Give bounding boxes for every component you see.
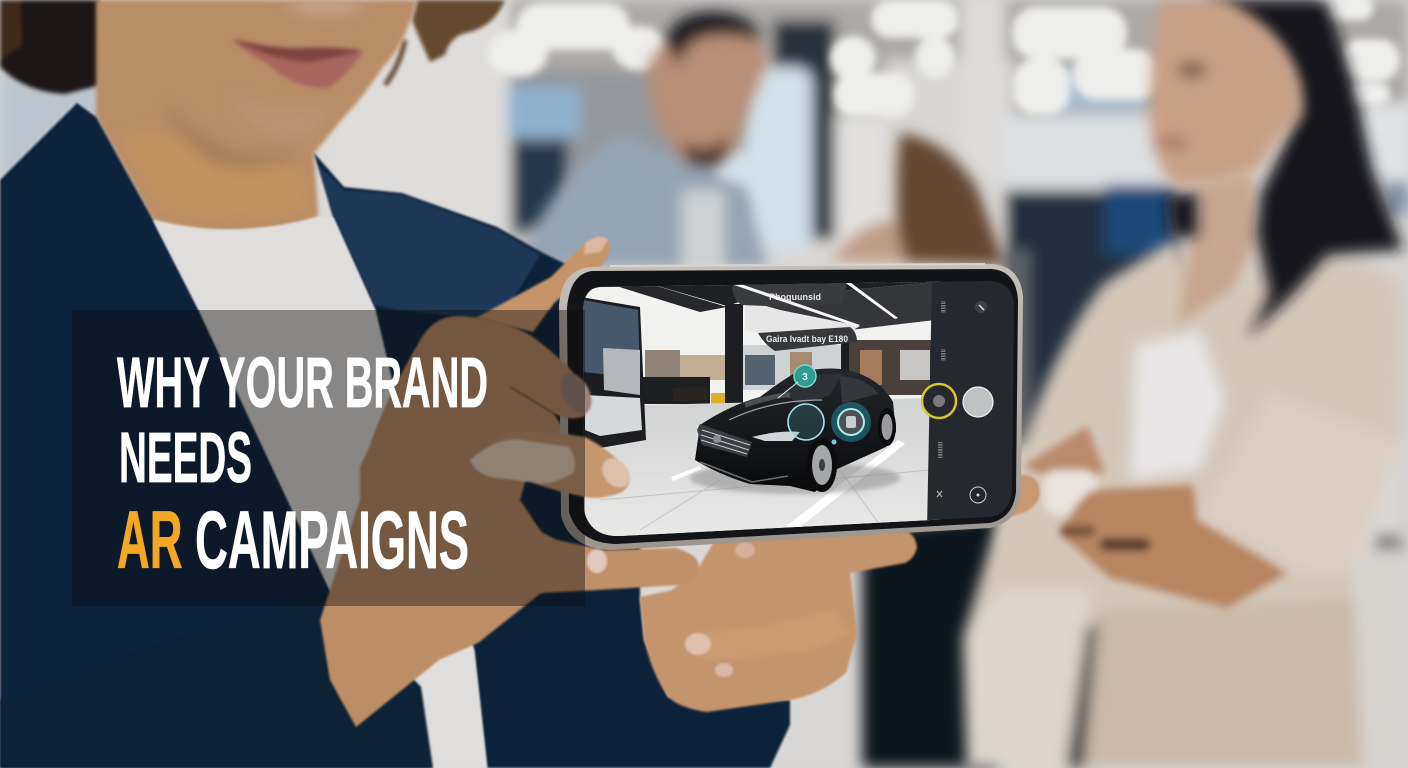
hair <box>0 0 505 94</box>
side mode labels: IIIIIII <box>939 301 945 313</box>
store scene <box>580 280 940 540</box>
yellow focus dial <box>922 384 956 418</box>
headline: NEEDS <box>119 419 252 498</box>
thumb on the right edge <box>1012 475 1040 516</box>
lips <box>232 39 363 88</box>
phone black bezel <box>567 269 1018 544</box>
nails <box>685 633 711 655</box>
face and neck <box>96 0 417 233</box>
right woman hair <box>1167 0 1403 338</box>
sign text: top: Phoquunsid <box>769 292 821 302</box>
camera control panel: IIIIIII <box>939 349 945 361</box>
person: woman on right <box>963 0 1403 768</box>
white shirt <box>153 217 487 768</box>
navy blazer <box>0 103 790 768</box>
right woman blazer <box>963 240 1403 768</box>
top icon <box>975 301 987 313</box>
person: foreground woman <box>0 0 790 768</box>
title panel <box>72 310 585 606</box>
right woman face <box>1150 0 1302 186</box>
ring finger <box>430 507 699 593</box>
camera control panel <box>920 281 1014 520</box>
signs <box>732 283 847 307</box>
finger <box>684 610 850 660</box>
headline: WHY YOUR BRAND <box>117 344 488 423</box>
car front wheel <box>807 438 837 492</box>
translucent overlay <box>72 310 585 606</box>
camera control panel: IIIIIIIIII <box>936 442 942 459</box>
phone screen <box>580 278 1025 540</box>
person: man in background <box>526 12 768 268</box>
smartphone <box>559 264 1025 550</box>
AR marker: door <box>831 402 871 442</box>
sign text: store: Gaira Ivadt bay E180 <box>766 334 848 345</box>
left hand fingers over phone <box>371 316 699 593</box>
left display <box>581 297 646 448</box>
bottom icons <box>970 487 986 503</box>
index finger <box>371 316 590 443</box>
right woman crossed arms <box>1023 426 1287 608</box>
right hand under phone <box>640 475 1040 712</box>
bent knuckle <box>470 440 575 484</box>
AR marker: roof <box>794 365 816 387</box>
blazer sleeve <box>0 590 433 768</box>
headline: AR CAMPAIGNS <box>117 495 469 586</box>
headline <box>117 344 488 586</box>
face shading <box>120 0 365 218</box>
car body <box>695 369 896 492</box>
car <box>690 365 900 494</box>
shutter button <box>963 387 993 417</box>
ceiling <box>658 282 932 306</box>
car shadow <box>690 462 900 494</box>
person: woman in background <box>830 133 1005 768</box>
left hand palm and thumb <box>320 237 610 727</box>
thumb <box>476 237 610 332</box>
middle finger <box>470 432 630 498</box>
floor <box>580 398 930 540</box>
ceiling lights <box>488 0 1400 117</box>
phone edge highlight <box>610 264 985 266</box>
phone metal frame <box>559 264 1023 550</box>
right woman neck <box>1178 172 1257 325</box>
car rear wheel <box>878 408 896 446</box>
AR marker: headlight ring <box>788 404 824 440</box>
car: 3 <box>802 372 808 383</box>
back store <box>645 312 727 382</box>
